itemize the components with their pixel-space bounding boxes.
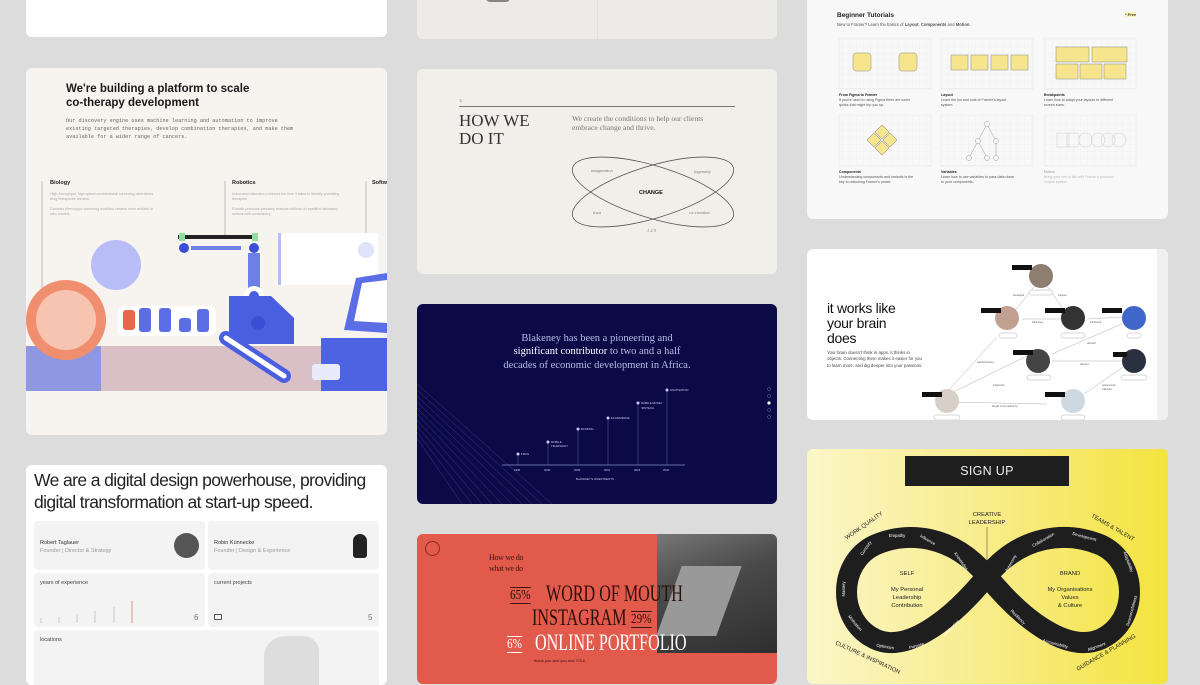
- card: digital design powerhouse: [26, 465, 387, 685]
- heading: powerhouse: [34, 470, 366, 512]
- card: top-left blank: [26, 0, 387, 37]
- card: Blakeney navy: [417, 304, 777, 504]
- diagram: change ellipses: 1·2·3: [647, 228, 657, 233]
- diagram: change ellipses: [572, 156, 734, 233]
- tile: years of experience: 6: [194, 613, 198, 622]
- graph: knowledge nodes: referenced in: [1102, 384, 1117, 387]
- diagram: infinity loop: BRAND: [1060, 571, 1080, 577]
- diagram: infinity loop: My Personal: [891, 587, 923, 593]
- diagram: infinity loop: Motivation: [847, 614, 864, 632]
- graph: knowledge nodes: [922, 264, 1148, 420]
- chart: investments timeline: TELEPHONY: [551, 444, 568, 448]
- diagram: infinity loop: Development: [1072, 531, 1098, 542]
- heading: Blakeney statement: [503, 333, 691, 371]
- diagram: change ellipses: ingenuity: [694, 169, 711, 174]
- graph: knowledge nodes: watched lecture: [977, 361, 994, 364]
- stats: channels: 65%: [510, 588, 531, 603]
- stats: channels: 29%: [631, 612, 652, 627]
- diagram: infinity loop: Empathy: [889, 533, 906, 538]
- heading: Blakeney statement: Blakeney has been a pioneering and: [521, 333, 673, 344]
- grid: tutorial thumbnails: to your components.: [941, 180, 974, 184]
- tile: Robert Taglauer: [34, 521, 205, 570]
- heading: platform: co-therapy development: [66, 97, 199, 109]
- chart: investments timeline: 2000: [544, 468, 551, 472]
- heading: brain: does: [827, 330, 856, 346]
- diagram: infinity loop: Contribution: [891, 603, 923, 609]
- grid: tutorial thumbnails: quirks that might trip you up.: [839, 103, 884, 107]
- chart: investments timeline: /FINTECH: [641, 406, 654, 410]
- diagram: infinity loop: Celebration: [942, 618, 961, 637]
- diagram: infinity loop: Resiliency: [1010, 608, 1027, 626]
- grid: tutorial thumbnails: Learn the ins and outs of Framer's layout: [941, 98, 1006, 102]
- diagram: infinity loop: Alignment: [1087, 641, 1107, 652]
- grid: tutorial thumbnails: Understanding components and variants is the: [839, 175, 913, 179]
- grid: tutorial thumbnails: Variables: [941, 170, 957, 174]
- diagram: infinity loop: My Organisations: [1047, 587, 1093, 593]
- heading: how we do: How we do: [489, 553, 523, 562]
- diagram: infinity loop: Optimism: [876, 643, 895, 651]
- diagram: change ellipses: trust: [593, 210, 602, 215]
- text: brain body: Your brain doesn't think in apps, it thinks in objects. Connecting them makes it easier for you to learn more, and dig deeper into your passions.: [827, 350, 922, 368]
- stats: channels: WORD OF MOUTH: [546, 581, 683, 606]
- graph: knowledge nodes: introduced: [1090, 321, 1102, 324]
- stats: channels: INSTAGRAM: [532, 605, 626, 630]
- stats: channels: ONLINE PORTFOLIO: [535, 630, 687, 655]
- tile: years of experience: [34, 573, 205, 627]
- diagram: infinity loop: Knowledge: [953, 551, 970, 572]
- chart: investments timeline: FMCG: [521, 452, 529, 456]
- button: SIGN UP: SIGN UP: [960, 464, 1014, 478]
- grid: tutorial thumbnails: motion system.: [1044, 180, 1068, 184]
- photo: laptop: [657, 534, 777, 653]
- heading: platform: [66, 83, 249, 109]
- columns: biology / robotics / software: Robotic protocols precisely execute millions of repetitive laboratory actions with consistency: [232, 207, 338, 216]
- diagram: infinity loop: Leadership: [893, 595, 921, 601]
- graph: knowledge nodes: influenced: [1032, 321, 1044, 324]
- tile: Robin Künnecke: Founder | Design & Experience: [214, 548, 290, 554]
- text: discovery engine: Our discovery engine uses machine learning and automation to improve existing targeted therapies, develop combination therapies, and make them available for a wider range of cancers.: [66, 118, 293, 140]
- stats: channels: 6%: [507, 637, 522, 652]
- diagram: infinity loop: Resourcefulness: [1125, 595, 1138, 626]
- chart: investments timeline: ECOMMERCE: [611, 416, 630, 420]
- text: conditions: [572, 114, 703, 132]
- heading: how we do: what we do: [489, 564, 523, 573]
- card: how we do it: [417, 69, 777, 274]
- rule and marker: [459, 106, 735, 107]
- grid: tutorial thumbnails: If you're used to using Figma there are some: [839, 98, 910, 102]
- diagram: infinity loop: CREATIVE: [973, 512, 1001, 518]
- heading: brain: your brain: [827, 315, 886, 331]
- card: top-middle beige: [417, 0, 777, 39]
- chart: investments timeline: BLAKENEY'S INVESTMENTS: [576, 477, 614, 481]
- chart: investments timeline: [417, 384, 771, 504]
- graph: knowledge nodes: bought a cool reebok by: [992, 405, 1018, 408]
- columns: biology / robotics / software: Complex phenotypic screening workflow creates more realistic in vitro models: [50, 207, 153, 216]
- graph: knowledge nodes: inspired by: [993, 384, 1005, 387]
- grid: tutorial thumbnails: [838, 38, 1136, 184]
- columns: biology / robotics / software: Softw: [372, 180, 387, 186]
- grid: tutorial thumbnails: Breakpoints: [1044, 93, 1065, 97]
- tile: locations: [34, 630, 379, 685]
- diagram: infinity loop: & Culture: [1058, 603, 1082, 609]
- card: it works like your brain: [807, 249, 1168, 420]
- diagram: infinity loop: Collaboration: [1031, 531, 1056, 548]
- heading: HOW WE DO IT: [459, 111, 530, 148]
- diagram: infinity loop: Curiosity: [859, 539, 873, 556]
- chart: investments timeline: 2005: [574, 468, 581, 472]
- tile: current projects: 5: [368, 613, 372, 622]
- grid: tutorial thumbnails: Learn how to use variables to pass data down: [941, 175, 1014, 179]
- diagram: infinity loop: Accountability: [1042, 638, 1069, 650]
- diagram: infinity loop: Adaptability: [1122, 550, 1135, 573]
- card: sign up leadership infinity: [807, 449, 1168, 684]
- chart: investments timeline: MOBILE MONEY: [641, 401, 663, 405]
- heading: tutorials: Beginner Tutorials: [837, 12, 894, 19]
- tile: Robin Künnecke: [208, 521, 379, 570]
- diagram: infinity loop: SELF: [900, 571, 915, 577]
- chart: investments timeline: 1996: [514, 468, 521, 472]
- chart: investments timeline: DIGITISATION: [670, 388, 688, 392]
- grid: tutorial thumbnails: system.: [941, 103, 953, 107]
- diagram: infinity loop: [834, 511, 1140, 676]
- heading: powerhouse: We are a digital design powerhouse, providing: [34, 470, 366, 490]
- graph: knowledge nodes: directed: [1080, 363, 1089, 366]
- grid: tutorial thumbnails: From Figma to Framer: [839, 93, 878, 97]
- diagram: infinity loop: Autonomy: [1004, 553, 1018, 573]
- heading: HOW WE DO IT: HOW WE: [459, 111, 530, 130]
- grid: tutorial thumbnails: Learn how to adapt your layouts to different: [1044, 98, 1113, 102]
- card: how we do it: ①: [459, 98, 463, 103]
- diagram: change ellipses: CHANGE: [639, 190, 663, 196]
- icon: badge: [425, 541, 440, 556]
- diagram: infinity loop: Mastery: [841, 581, 846, 596]
- card: beginner tutorials: * Free: [1125, 12, 1136, 17]
- graph: knowledge nodes: directed: [1087, 342, 1096, 345]
- diagram: infinity loop: CULTURE & INSPIRATION: [834, 640, 901, 676]
- columns: biology / robotics / software: Biology: [50, 180, 70, 186]
- card: beginner tutorials: [807, 0, 1168, 219]
- tile: current projects: current projects: [214, 580, 252, 586]
- text: conditions: embrace change and thrive.: [572, 123, 656, 132]
- button: SIGN UP: [905, 456, 1069, 486]
- tile: Robert Taglauer: Robert Taglauer: [40, 540, 79, 546]
- chart: investments timeline: MOBILE: [551, 440, 562, 444]
- card: beginner tutorials: New to Framer? Learn the basics of Layout, Components and Motion.: [837, 22, 971, 27]
- chart: investments timeline: 2020: [663, 468, 670, 472]
- heading: brain: [827, 300, 896, 346]
- columns: biology / robotics / software: Automated laboratory reduces the time it takes to identify promising therapies: [232, 192, 339, 201]
- columns: biology / robotics / software: Robotics: [232, 180, 256, 186]
- heading: Blakeney statement: significant contributor to two and a half: [514, 346, 680, 357]
- tile: Robert Taglauer: Founder | Director & Strategy: [40, 548, 111, 554]
- card: co-therapy platform: [26, 68, 387, 435]
- heading: brain: it works like: [827, 300, 895, 316]
- diagram: infinity loop: WORK QUALITY: [844, 511, 884, 541]
- diagram: infinity loop: Values: [1061, 595, 1079, 601]
- graph: knowledge nodes: collection: [1102, 388, 1113, 391]
- tile: locations: locations: [40, 637, 62, 643]
- heading: Blakeney statement: decades of economic development in Africa.: [503, 360, 691, 371]
- diagram: change ellipses: co-creation: [689, 210, 710, 215]
- tile: Robin Künnecke: Robin Künnecke: [214, 540, 254, 546]
- chart: investments timeline: 2010: [604, 468, 611, 472]
- chart: investments timeline: 2015: [634, 468, 641, 472]
- diagram: infinity loop: TEAMS & TALENT: [1090, 513, 1136, 543]
- tile: years of experience: years of experience: [40, 580, 88, 586]
- stats: channels: [507, 581, 687, 663]
- graph: knowledge nodes: inspired: [1058, 294, 1067, 297]
- heading: powerhouse: digital transformation at start-up speed.: [34, 492, 313, 512]
- heading: platform: We're building a platform to scale: [66, 83, 249, 95]
- illustration: lab robotics: [26, 181, 387, 391]
- diagram: infinity loop: Influence: [919, 533, 937, 546]
- heading: how we do: [489, 553, 524, 573]
- diagram: infinity loop: Purpose: [908, 641, 925, 650]
- grid: tutorial thumbnails: Motion: [1044, 170, 1055, 174]
- grid: tutorial thumbnails: screen sizes.: [1044, 103, 1065, 107]
- stats: channels: thank you and you and YOU!: [534, 658, 585, 663]
- tile: current projects: [208, 573, 379, 627]
- diagram: infinity loop: LEADERSHIP: [969, 520, 1005, 526]
- columns: biology / robotics / software: [50, 180, 387, 216]
- grid: tutorial thumbnails: Layout: [941, 93, 954, 97]
- diagram: change ellipses: imagination: [591, 168, 614, 173]
- grid: tutorial thumbnails: key to unlocking Framer's power.: [839, 180, 891, 184]
- grid: tutorial thumbnails: Bring your site to life with Framer's powerful: [1044, 175, 1114, 179]
- heading: HOW WE DO IT: DO IT: [459, 129, 504, 148]
- columns: biology / robotics / software: High-throughput, high-speed combinatorial screening determines drug therapeutic window: [50, 192, 153, 201]
- diagram: infinity loop: GUIDANCE & PLANNING: [1076, 633, 1138, 673]
- card: how we do what we do (red): [417, 534, 777, 684]
- graph: knowledge nodes: developed: [1013, 294, 1025, 297]
- text: conditions: We create the conditions to help our clients: [572, 114, 703, 123]
- grid: tutorial thumbnails: Components: [839, 170, 861, 174]
- chart: investments timeline: BANKING: [581, 427, 594, 431]
